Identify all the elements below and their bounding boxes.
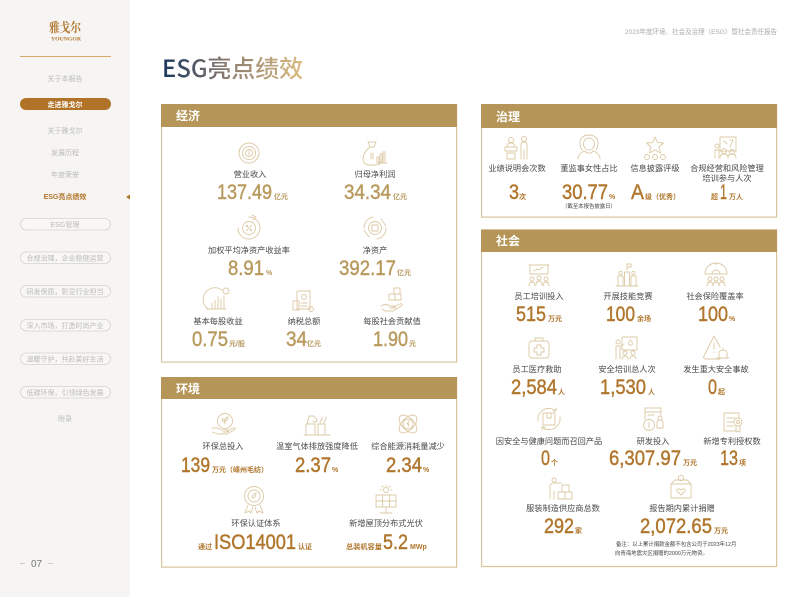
icon: podium [616, 264, 638, 286]
metric: R&D investment: 万元 [683, 459, 697, 467]
metric: environmental investment: 万元（嵊州毛纺） [212, 465, 268, 474]
sidebar [0, 0, 130, 597]
metric: revenue: 亿元 [274, 192, 288, 201]
metric: EPS: 基本每股收益 [193, 316, 243, 326]
nav: current page: ESG亮点绩效 [44, 192, 86, 201]
icon: factory smoke [304, 416, 330, 435]
logo: 雅戈尔 [49, 17, 82, 36]
metric: female directors: 30.77 [562, 181, 608, 204]
metric: results briefings: 3 [509, 181, 519, 204]
metric: compliance training: 合规经营和风险管理 [690, 163, 764, 173]
nav: honors: 年度荣誉 [51, 170, 79, 179]
nav: market [20, 320, 110, 331]
icon: woman portrait [578, 135, 600, 159]
metric: GHG intensity: 温室气体排放强度降低 [276, 441, 358, 451]
nav: history: 发展历程 [51, 148, 79, 157]
nav: active section pill [20, 98, 111, 110]
metric: social contribution: 每股社会贡献值 [363, 316, 421, 326]
metric: suppliers [526, 478, 600, 538]
nav: low carbon [20, 386, 110, 398]
metric: donations [615, 475, 736, 557]
heading: environment [161, 377, 457, 399]
metric: revenue [217, 143, 288, 204]
heading: society [481, 230, 777, 252]
metric: net assets [339, 217, 411, 280]
metric: GHG intensity: 2.37 [295, 454, 331, 477]
metric: disclosure rating: 信息披露评级 [630, 163, 680, 173]
metric: certification: 通过 [198, 542, 212, 551]
icon: award ribbon [244, 486, 264, 513]
metric: safety training [598, 337, 656, 399]
note: donation remark: 向青海地震灾区捐赠的2000万元物资。 [615, 549, 708, 557]
metric: net profit: 归母净利润 [355, 169, 395, 179]
metric: safety training: 1,530 [600, 376, 646, 399]
metric: medical aid: 人 [558, 388, 565, 396]
icon: donation box [671, 475, 691, 498]
metric: patents: 新增专利授权数 [703, 436, 761, 446]
metric: donations: 2,072.65 [640, 515, 712, 538]
heading: environment: 环境 [176, 381, 200, 396]
metric: suppliers: 292 [544, 515, 574, 538]
metric: certification: ISO14001 [214, 531, 296, 554]
nav: care [20, 353, 110, 364]
metric: medical aid [511, 338, 565, 399]
icon: supplier boxes [550, 478, 572, 499]
metric: net assets: 392.17 [339, 257, 396, 280]
nav: R&D [20, 286, 110, 297]
metric: safety accidents: 0 [708, 376, 717, 399]
heading: governance: 治理 [496, 109, 520, 124]
heading: governance [481, 104, 777, 128]
metric: solar: 新增屋顶分布式光伏 [349, 518, 423, 528]
icon: stars [644, 137, 666, 160]
metric: results briefings [488, 136, 546, 204]
icon: assets cycle [364, 217, 386, 239]
metric: certification: 环保认证体系 [231, 518, 281, 528]
metric: training investment: 万元 [548, 315, 562, 323]
metric: energy consumption: 2.34 [386, 454, 422, 477]
metric: female directors: 董监事女性占比 [560, 163, 618, 173]
metric: social insurance: 社会保险覆盖率 [686, 291, 744, 301]
metric: safety training: 人 [648, 388, 655, 396]
icon: hand with boxes [381, 288, 402, 311]
metric: net profit [344, 142, 407, 204]
metric: social contribution [363, 288, 421, 351]
nav: about report: 关于本报告 [48, 74, 82, 83]
icon: training audience [529, 265, 549, 286]
metric: safety accidents: 发生重大安全事故 [683, 364, 749, 374]
metric: net profit: 34.34 [344, 181, 391, 204]
panel: environment [161, 377, 457, 567]
metric: training investment: 员工培训投入 [514, 291, 564, 301]
metric: donations: 报告期内累计捐赠 [649, 503, 715, 513]
metric: suppliers: 家 [575, 526, 582, 535]
metric: environmental investment: 环保总投入 [203, 441, 243, 451]
icon: percent ring [238, 215, 260, 239]
metric: patents: 项 [739, 459, 746, 467]
metric: compliance training: 1 [720, 181, 727, 204]
nav: market: 深入市场，打造时尚产业 [26, 321, 104, 330]
metric: training investment [514, 265, 564, 326]
icon: solar panel [376, 485, 396, 513]
logo: YOUNGOR [51, 36, 82, 42]
metric: tax: 34 [286, 328, 307, 351]
metric: patents: 13 [720, 447, 738, 470]
metric: solar: 5.2 [383, 531, 408, 554]
metric: social insurance: % [729, 316, 736, 323]
metric: energy consumption: % [423, 467, 430, 474]
metric: safety accidents: 起 [718, 387, 725, 396]
icon: tax document [293, 291, 314, 312]
logo [49, 17, 82, 42]
note: as of disclosure date: （截至本报告披露日） [562, 202, 616, 210]
metric: net assets: 净资产 [363, 245, 387, 255]
nav: ESG management [20, 218, 110, 230]
metric: GHG intensity [276, 416, 358, 477]
nav: low carbon: 低碳环保，引领绿色发展 [26, 388, 104, 397]
metric: patents [703, 413, 761, 470]
metric: compliance training: 培训参与人次 [702, 173, 752, 183]
metric: female directors: % [609, 194, 616, 201]
metric: training investment: 515 [516, 303, 546, 326]
icon: patent certificate [724, 413, 742, 432]
metric: R&D investment [609, 408, 697, 470]
metric: skills contests: 余场 [637, 314, 651, 323]
metric: safety accidents [683, 336, 749, 399]
metric: tax [286, 291, 321, 351]
metric: tax: 纳税总额 [288, 316, 320, 326]
icon: money bag [363, 142, 387, 165]
metric: solar: 总装机容量 [346, 542, 382, 551]
metric: EPS [192, 288, 245, 351]
metric: certification: 认证 [298, 542, 312, 551]
nav: current marker arrow [126, 194, 130, 200]
heading: economy: 经济 [176, 108, 200, 123]
page number [20, 559, 53, 570]
icon: safety class [616, 337, 637, 359]
metric: social insurance [686, 263, 744, 326]
metric: EPS: 0.75 [192, 328, 228, 351]
metric: revenue: 137.49 [217, 181, 272, 204]
metric: skills contests [603, 264, 653, 326]
metric: energy consumption: 综合能源消耗量减少 [371, 441, 445, 451]
icon: atom energy [396, 412, 420, 436]
metric: social contribution: 1.90 [373, 328, 408, 351]
nav: appendix: 附录 [58, 414, 72, 423]
metric: results briefings: 业绩说明会次数 [488, 163, 546, 173]
metric: R&D investment: 6,307.97 [609, 447, 681, 470]
heading: economy [161, 104, 457, 127]
metric: solar [346, 485, 427, 554]
metric: skills contests: 开展技能竞赛 [603, 291, 653, 301]
metric: environmental investment [181, 414, 268, 477]
metric: tax: 亿元 [307, 339, 321, 348]
metric: compliance training: 万人 [729, 193, 743, 201]
metric: net profit: 亿元 [393, 192, 407, 201]
icon: training board [715, 137, 736, 158]
nav: compliance: 合规治理，企业稳健运营 [26, 254, 104, 262]
metric: certification [198, 486, 312, 554]
icon: umbrella people [705, 263, 727, 286]
metric: disclosure rating [630, 137, 680, 204]
panel: economy [161, 104, 457, 362]
icon: growth bars [203, 288, 229, 309]
metric: skills contests: 100 [606, 303, 635, 326]
metric: social insurance: 100 [698, 303, 728, 326]
metric: ROE: 加权平均净资产收益率 [208, 245, 290, 255]
metric: net assets: 亿元 [397, 268, 411, 277]
metric: ROE [208, 215, 290, 280]
icon: R&D coin [644, 408, 663, 430]
panel: governance [481, 104, 777, 217]
metric: donations: 万元 [714, 527, 728, 535]
metric: GHG intensity: % [332, 467, 339, 474]
metric: energy consumption [371, 412, 445, 477]
nav: ESG management: ESG管理 [51, 220, 79, 229]
page number: 07 [31, 559, 42, 570]
metric: social contribution: 元 [409, 340, 416, 348]
icon: warning triangle [704, 336, 729, 359]
icon: revenue [239, 143, 259, 163]
metric: environmental investment: 139 [181, 454, 210, 477]
heading: society: 社会 [496, 233, 520, 248]
metric: solar: MWp [410, 544, 427, 551]
metric: R&D investment: 研发投入 [637, 436, 669, 446]
metric: ROE: % [266, 270, 273, 277]
nav: active section pill: 走进雅戈尔 [48, 100, 82, 109]
icon: recall box [538, 408, 560, 430]
metric: EPS: 元/股 [229, 340, 245, 348]
nav: care: 温暖守护，共赴美好生活 [26, 354, 104, 364]
metric: product recalls: 因安全与健康问题而召回产品 [496, 436, 602, 446]
nav: about youngor: 关于雅戈尔 [48, 126, 82, 135]
metric: female directors [560, 135, 618, 210]
panel: society [481, 230, 777, 566]
metric: product recalls: 0 [541, 447, 550, 470]
title: ESG亮点绩效 [162, 49, 303, 84]
report header: 2023年度环境、社会及治理（ESG）暨社会责任报告 [625, 27, 777, 36]
metric: disclosure rating: 级（优秀） [645, 192, 680, 201]
metric: safety training: 安全培训总人次 [598, 364, 656, 374]
nav: R&D: 研发保质，彰显行业担当 [26, 287, 104, 296]
metric: ROE: 8.91 [228, 257, 264, 280]
metric: medical aid: 2,584 [511, 376, 557, 399]
icon: hand with leaf globe [212, 414, 235, 434]
note: donation remark [615, 540, 736, 557]
icon: first-aid kit [529, 338, 549, 358]
metric: product recalls [496, 408, 602, 470]
icon: presenters at desk [505, 136, 527, 159]
note: donation remark: 备注：以上累计捐款金额不包含公司于2023年12月 [616, 540, 736, 548]
metric: disclosure rating: A [631, 181, 644, 204]
nav: compliance [20, 252, 110, 264]
metric: results briefings: 次 [519, 192, 526, 201]
metric: compliance training: 超 [711, 192, 718, 201]
metric: compliance training [690, 137, 764, 204]
metric: revenue: 营业收入 [234, 169, 266, 179]
metric: medical aid: 员工医疗救助 [512, 364, 562, 374]
metric: suppliers: 服装制造供应商总数 [526, 503, 600, 513]
metric: product recalls: 个 [551, 459, 558, 467]
